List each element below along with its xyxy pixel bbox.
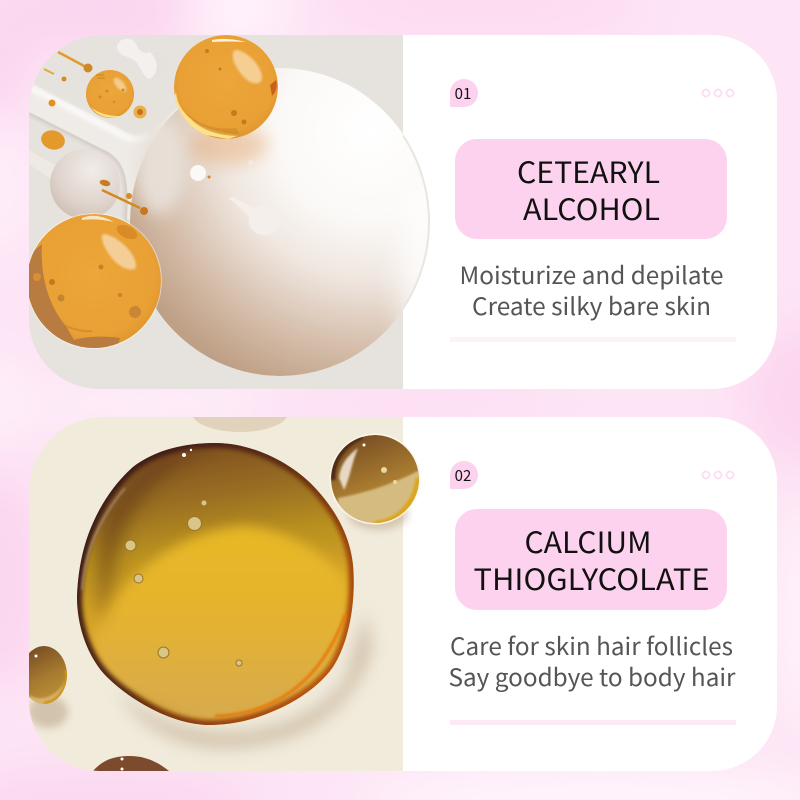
title pill: ALCOHOL xyxy=(523,187,660,229)
photo: amber oil droplets xyxy=(21,394,420,771)
cream sphere rim on card xyxy=(403,134,430,310)
amber sphere large xyxy=(26,213,162,352)
title pill xyxy=(455,509,727,610)
pearl sphere xyxy=(50,149,120,219)
white card xyxy=(403,35,777,389)
description xyxy=(448,627,736,693)
amber sphere small xyxy=(86,70,146,118)
panel: calcium thioglycolate xyxy=(21,394,777,771)
oil drop bubbles xyxy=(125,449,242,666)
panel: cetearyl alcohol xyxy=(26,35,777,389)
description xyxy=(460,256,724,322)
number badge 02: 02 xyxy=(455,465,471,486)
small drop left xyxy=(29,646,67,704)
description: Moisturize and depilate xyxy=(460,256,724,291)
three dots xyxy=(702,90,734,96)
small drop right xyxy=(330,434,420,530)
amber specks and streaks xyxy=(39,52,148,215)
photo: cream and amber spheres xyxy=(26,35,451,389)
cream stream xyxy=(29,112,128,222)
partial drop bottom xyxy=(93,756,169,771)
title pill xyxy=(455,139,727,239)
number badge 01: 01 xyxy=(455,83,471,104)
number badge 02 xyxy=(450,461,478,489)
small white droplet xyxy=(117,38,156,79)
number badge 01 xyxy=(450,79,478,107)
description: Create silky bare skin xyxy=(472,287,711,322)
white card xyxy=(403,417,777,771)
description: Say goodbye to body hair xyxy=(448,658,736,693)
three dots xyxy=(702,472,734,478)
amber sphere top xyxy=(172,35,278,139)
large oil drop xyxy=(70,440,360,730)
stream junction blending into sphere xyxy=(134,115,186,215)
description: Care for skin hair follicles xyxy=(450,627,733,662)
title pill: CALCIUM xyxy=(524,520,652,562)
title pill: CETEARYL xyxy=(517,150,660,192)
title pill: THIOGLYCOLATE xyxy=(474,557,710,599)
cream drop accents xyxy=(190,165,206,181)
cream sphere xyxy=(130,68,451,376)
